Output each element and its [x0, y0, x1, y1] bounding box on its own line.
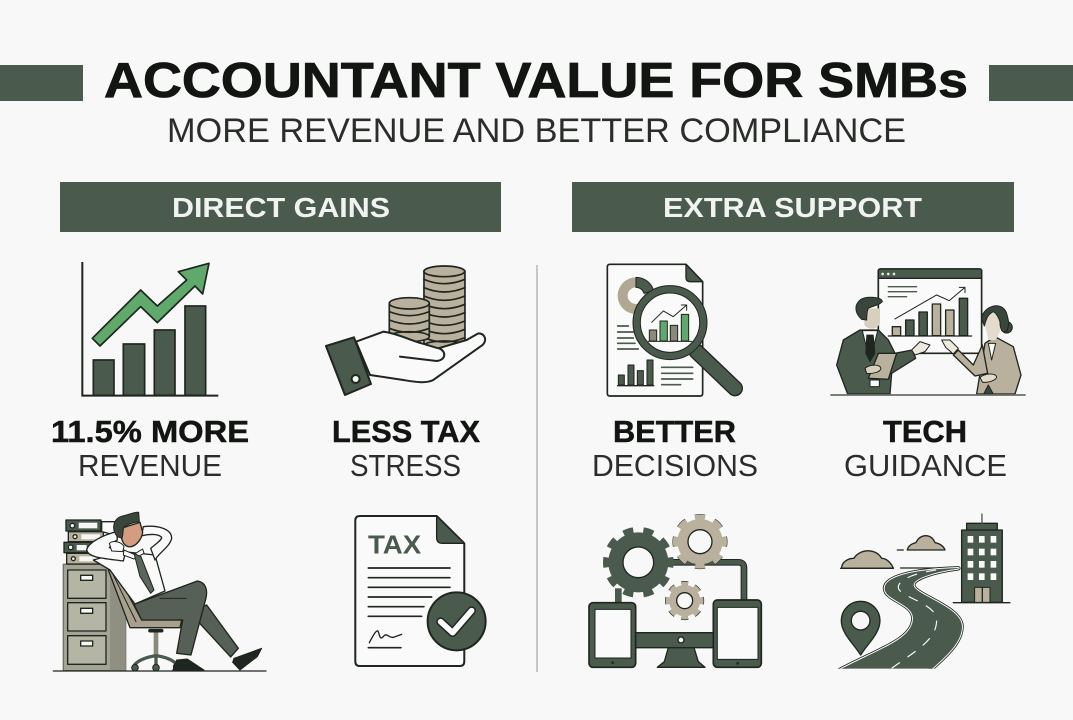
male advisor — [837, 297, 930, 394]
label: tech guidance — [844, 414, 1007, 483]
label: 11.5% more revenue — [51, 414, 249, 483]
subtitle: MORE REVENUE AND BETTER COMPLIANCE — [167, 112, 906, 150]
torso and arms — [87, 522, 172, 604]
icon: gears and connected devices — [589, 517, 761, 667]
panel header: extra support — [572, 182, 1014, 232]
label: better decisions: DECISIONS — [592, 448, 758, 483]
icon: road to office building with map pin — [837, 514, 1010, 672]
icon: relaxed man at filing cabinet — [53, 512, 266, 671]
label: tech guidance: TECH — [883, 414, 967, 449]
right title accent bar — [989, 65, 1073, 101]
left title accent bar — [0, 65, 83, 101]
head — [114, 512, 154, 593]
monitor — [636, 633, 713, 667]
panel header: direct gains — [60, 182, 501, 232]
female advisor — [942, 306, 1021, 394]
label: better decisions — [592, 414, 758, 483]
label: tech guidance: GUIDANCE — [844, 448, 1007, 483]
icon: two advisors at a presentation board — [831, 269, 1025, 395]
title: ACCOUNTANT VALUE FOR SMBs — [104, 54, 968, 108]
label: 11.5% more revenue: REVENUE — [78, 448, 222, 483]
label: less tax stress: STRESS — [350, 448, 461, 483]
label: better decisions: BETTER — [613, 414, 736, 449]
dark gear — [607, 531, 670, 594]
road — [837, 568, 962, 672]
label: less tax stress — [332, 414, 480, 483]
tan gear — [675, 517, 725, 566]
icon: magnifier over report — [607, 264, 735, 396]
icon: hand holding coins — [326, 266, 485, 395]
panel header: extra support: EXTRA SUPPORT — [663, 192, 922, 223]
label: 11.5% more revenue: 11.5% MORE — [51, 414, 249, 449]
building — [953, 514, 1010, 603]
icon: approved tax document — [355, 516, 486, 666]
icon: approved tax document: TAX — [368, 529, 422, 559]
clouds — [841, 536, 960, 568]
label: less tax stress: LESS TAX — [332, 414, 480, 449]
office chair — [108, 570, 182, 671]
filing cabinet — [63, 564, 126, 671]
shoes — [173, 648, 262, 671]
map pin — [841, 601, 880, 655]
icon: revenue bar chart with rising arrow — [82, 262, 218, 396]
binders — [64, 520, 103, 564]
legs — [134, 581, 238, 657]
tablets — [589, 600, 761, 667]
presentation board — [878, 269, 982, 353]
small gear — [667, 583, 702, 618]
panel header: direct gains: DIRECT GAINS — [172, 192, 390, 223]
